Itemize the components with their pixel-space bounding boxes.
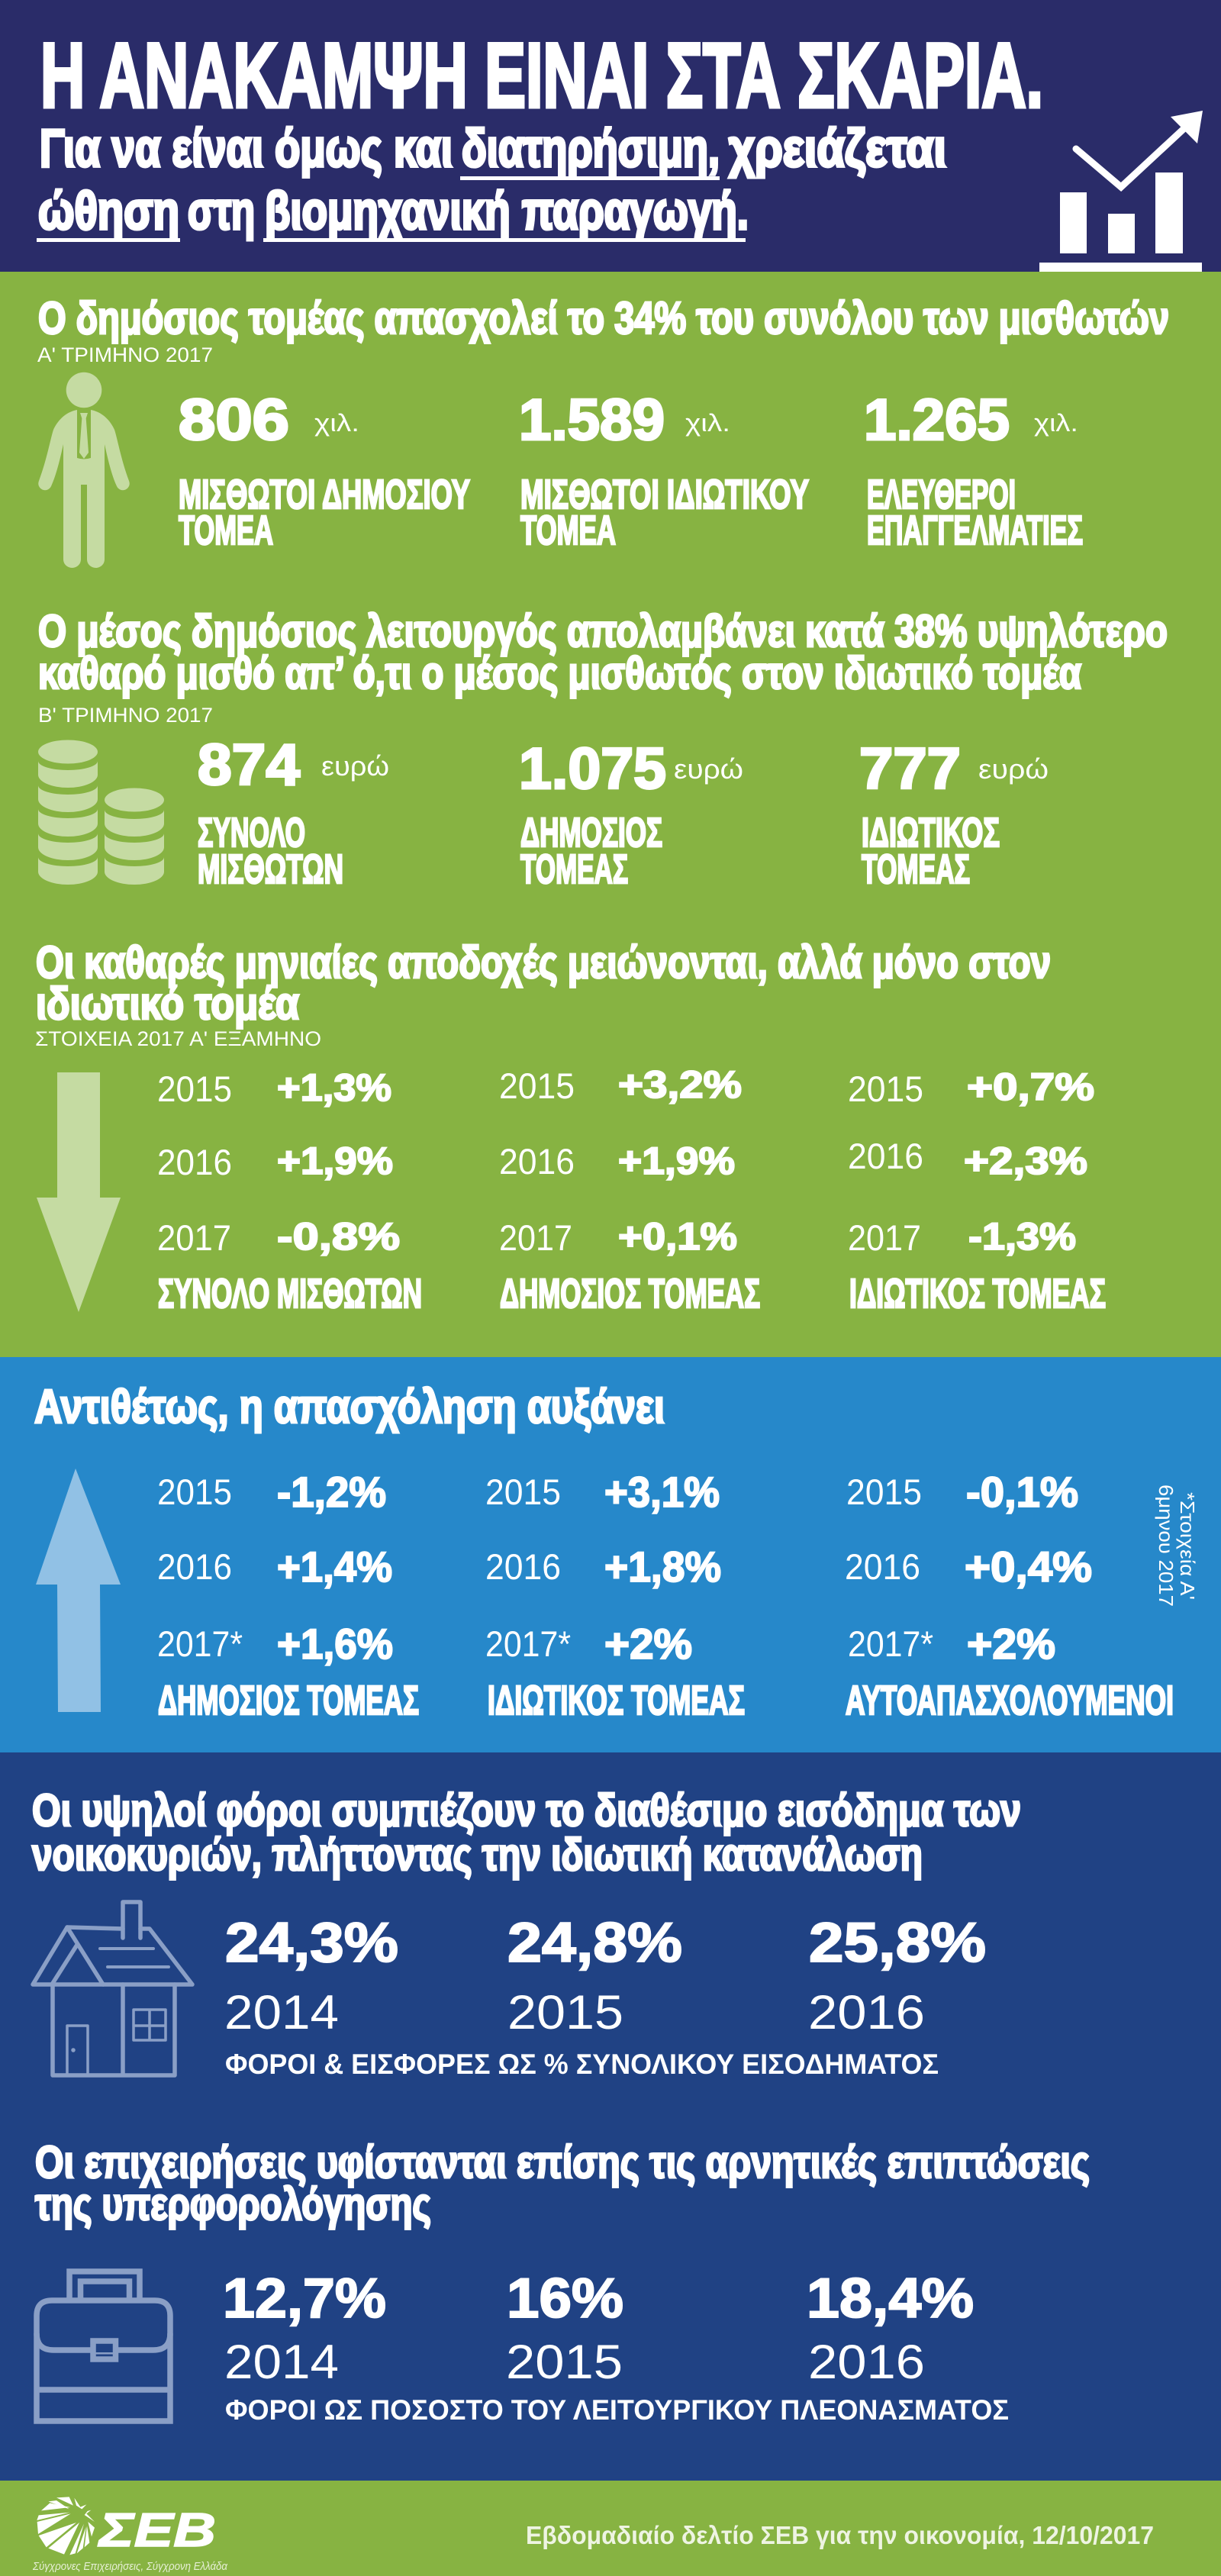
stat: all employees pay: ΣΥΝΟΛΟ [198,810,305,856]
panel: dark blue taxes section [0,1752,1221,2481]
column: public sector earnings [499,1063,760,1317]
stat: private sector pay: ΤΟΜΕΑΣ [862,846,970,892]
panel: green wages section [0,272,1221,1357]
column: private sector employment: 2016 [485,1546,561,1587]
stat: household tax 2015: 2015 [507,1986,623,2039]
column: public sector earnings: +3,2% [618,1063,742,1106]
stat: public employees: 806 [179,388,289,453]
icon: coin stacks [38,740,164,885]
stat: public sector pay: ΔΗΜΟΣΙΟΣ [520,810,662,856]
column: private sector earnings: 2017 [848,1217,921,1258]
icon: person [38,372,130,568]
stat: all employees pay: ευρώ [321,750,389,782]
footer source text: Εβδομαδιαίο δελτίο ΣΕΒ για την οικονομία, 12/10/2017 [526,2521,1154,2549]
footnote rotated [1155,1485,1199,1607]
stat: private sector pay: 777 [859,737,961,801]
heading: net monthly earnings: ιδιωτικό τομέα [36,978,299,1029]
column: all employees earnings: +1,9% [277,1140,393,1182]
stat: public employees [179,388,470,553]
heading: net pay gap [38,606,1168,698]
column: public sector earnings: ΔΗΜΟΣΙΟΣ ΤΟΜΕΑΣ [500,1271,760,1317]
column: public sector earnings: +1,9% [618,1140,735,1182]
stat: public sector pay: 1.075 [519,737,666,801]
column: self-employed: 2016 [845,1546,920,1587]
arrow: up [36,1469,121,1712]
stat: self-employed: ΕΛΕΥΘΕΡΟΙ [867,472,1016,517]
stat: self-employed: 1.265 [864,388,1010,453]
subtitle: ώθηση [38,181,179,240]
logo: SEV: Σύγχρονες Επιχειρήσεις, Σύγχρονη Ελλάδα [32,2560,227,2573]
subtitle [37,118,946,242]
column: public sector employment: -1,2% [277,1468,386,1516]
stat: private employees: ΜΙΣΘΩΤΟΙ ΙΔΙΩΤΙΚΟΥ [520,472,809,517]
icon: rising bar chart with arrow [1039,111,1203,272]
panel: header [0,0,1221,272]
stat: private employees: ΤΟΜΕΑ [520,508,616,553]
column: private sector earnings [848,1066,1106,1317]
column: public sector earnings: +0,1% [618,1215,737,1258]
date note: Α' ΤΡΙΜΗΝΟ 2017 [37,343,213,366]
stat: private sector pay [859,737,1049,892]
stat: household tax 2016: 25,8% [809,1912,986,1974]
column: private sector earnings: 2016 [848,1136,923,1176]
stat: self-employed [864,388,1083,553]
stat: private employees: χιλ. [685,409,730,437]
column: public sector earnings: 2017 [499,1217,572,1258]
heading: household taxes: νοικοκυριών, πλήττοντας την ιδιωτική κατανάλωση [32,1830,923,1880]
stat: business tax 2016: 2016 [808,2336,925,2389]
column: self-employed [845,1468,1174,1723]
column: private sector employment [485,1468,745,1723]
column: public sector earnings: 2015 [499,1066,575,1106]
column: all employees earnings: 2015 [157,1069,232,1109]
stat: self-employed: ΕΠΑΓΓΕΛΜΑΤΙΕΣ [867,508,1083,553]
stat: business tax 2015 [506,2268,623,2389]
column: public sector employment: +1,6% [277,1620,393,1668]
column: self-employed: -0,1% [966,1468,1078,1516]
stat: household tax 2014: 2014 [224,1986,339,2039]
arrow: down [37,1072,121,1312]
stat: private sector pay: ευρώ [978,753,1049,785]
footnote rotated: *Στοιχεία Α' [1176,1492,1199,1600]
logo: SEV: ΣΕΒ [98,2504,216,2557]
subtitle: χρειάζεται [729,118,946,178]
column: public sector employment: ΔΗΜΟΣΙΟΣ ΤΟΜΕΑΣ [158,1678,419,1723]
stat: business tax 2015: 16% [507,2268,623,2329]
caption: business taxes: ΦΟΡΟΙ ΩΣ ΠΟΣΟΣΤΟ ΤΟΥ ΛΕΙΤΟΥΡΓΙΚΟΥ ΠΛΕΟΝΑΣΜΑΤΟΣ [225,2394,1009,2426]
column: all employees earnings: ΣΥΝΟΛΟ ΜΙΣΘΩΤΩΝ [158,1271,422,1317]
column: self-employed: 2015 [846,1472,922,1512]
stat: private employees: 1.589 [519,388,665,453]
stat: public sector pay [519,737,743,892]
stat: private sector pay: ΙΔΙΩΤΙΚΟΣ [862,810,1000,856]
date note: Β' ΤΡΙΜΗΝΟ 2017 [38,704,213,727]
column: all employees earnings: 2017 [157,1217,231,1258]
column: private sector earnings: +2,3% [964,1140,1087,1182]
column: self-employed: +2% [967,1620,1055,1668]
stat: household tax 2014 [224,1912,398,2039]
stat: public sector pay: ευρώ [674,753,743,785]
stat: household tax 2015: 24,8% [507,1912,682,1974]
stat: business tax 2016 [807,2268,974,2389]
stat: household tax 2015 [507,1912,682,2039]
icon: briefcase [37,2271,170,2421]
subtitle: στη [188,181,255,240]
stat: all employees pay: ΜΙΣΘΩΤΩΝ [198,846,343,892]
column: private sector employment: 2015 [485,1472,561,1512]
stat: business tax 2016: 18,4% [807,2268,974,2329]
heading: employment rises: Αντιθέτως, η απασχόληση αυξάνει [34,1381,665,1433]
column: private sector employment: 2017* [485,1623,571,1664]
stat: self-employed: χιλ. [1034,409,1078,437]
stat: public employees: ΜΙΣΘΩΤΟΙ ΔΗΜΟΣΙΟΥ [179,472,470,517]
column: private sector earnings: +0,7% [967,1066,1094,1108]
caption: household taxes: ΦΟΡΟΙ & ΕΙΣΦΟΡΕΣ ΩΣ % ΣΥΝΟΛΙΚΟΥ ΕΙΣΟΔΗΜΑΤΟΣ [225,2049,939,2080]
stat: private employees [519,388,809,553]
panel: footer [0,2481,1221,2576]
stat: household tax 2014: 24,3% [225,1912,398,1974]
column: public sector earnings: 2016 [499,1141,575,1182]
column: private sector employment: ΙΔΙΩΤΙΚΟΣ ΤΟΜΕΑΣ [488,1678,745,1723]
panel: blue employment section [0,1357,1221,1752]
heading: net monthly earnings [36,937,1051,1029]
date note: ΣΤΟΙΧΕΙΑ 2017 Α' ΕΞΑΜΗΝΟ [35,1027,321,1050]
column: all employees earnings: 2016 [157,1142,232,1182]
column: private sector employment: +3,1% [604,1468,720,1516]
stat: business tax 2014: 12,7% [223,2268,386,2329]
column: public sector employment: 2015 [157,1472,232,1512]
column: self-employed: 2017* [848,1623,933,1664]
column: all employees earnings [157,1066,422,1317]
column: public sector employment: +1,4% [277,1543,392,1591]
column: public sector employment: 2016 [157,1546,232,1587]
heading: business taxes: της υπερφορολόγησης [35,2179,431,2229]
stat: household tax 2016 [808,1912,986,2039]
stat: household tax 2016: 2016 [808,1986,925,2039]
subtitle: βιομηχανική παραγωγή. [265,181,749,240]
column: private sector earnings: 2015 [848,1069,923,1109]
column: public sector employment: 2017* [157,1623,243,1664]
heading: business taxes [35,2137,1090,2229]
column: all employees earnings: +1,3% [277,1066,391,1109]
column: public sector employment [157,1468,419,1723]
heading: household taxes: Οι υψηλοί φόροι συμπιέζουν το διαθέσιμο εισόδημα των [32,1785,1021,1836]
stat: public employees: ΤΟΜΕΑ [179,508,273,553]
stat: business tax 2014: 2014 [224,2336,339,2389]
stat: public sector pay: ΤΟΜΕΑΣ [520,846,628,892]
stat: business tax 2014 [223,2268,386,2389]
column: private sector earnings: -1,3% [968,1215,1076,1258]
subtitle: Για να είναι όμως και [40,118,453,178]
subtitle: διατηρήσιμη, [462,118,720,178]
column: private sector employment: +1,8% [604,1543,721,1591]
stat: business tax 2015: 2015 [506,2336,623,2389]
column: self-employed: +0,4% [965,1543,1092,1591]
heading: household taxes [32,1785,1021,1880]
stat: public employees: χιλ. [314,409,359,437]
stat: all employees pay [198,733,389,892]
column: private sector employment: +2% [604,1620,692,1668]
column: all employees earnings: -0,8% [277,1215,400,1258]
stat: all employees pay: 874 [198,733,300,798]
footnote rotated: 6μηνου 2017 [1155,1485,1178,1607]
logo: SEV [32,2497,227,2573]
icon: house [33,1902,192,2075]
